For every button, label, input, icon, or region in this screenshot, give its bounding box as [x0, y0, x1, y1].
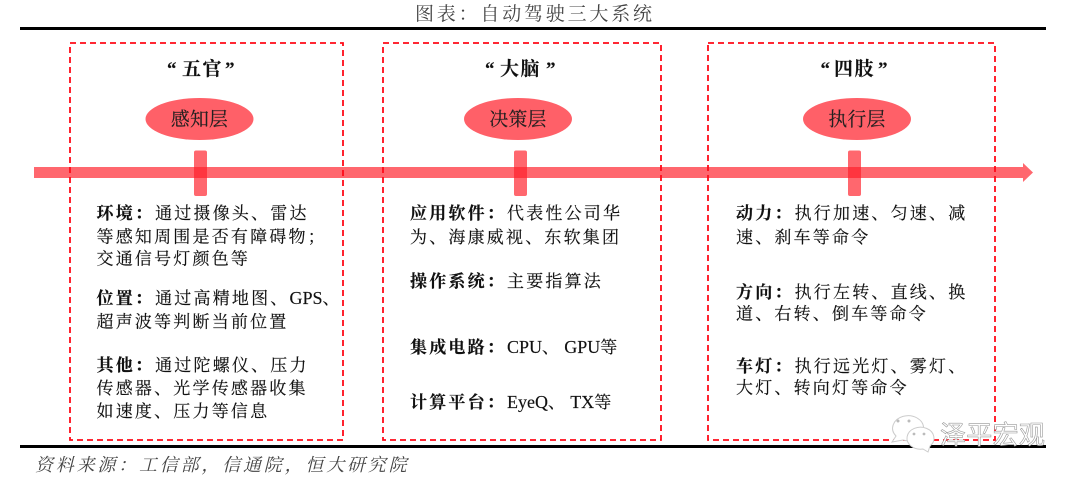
heading: 四肢 [834, 57, 875, 80]
text block: environment [96, 204, 327, 268]
ellipse label [464, 98, 572, 140]
heading: “ [820, 59, 832, 80]
text block: power: 速、刹车等命令 [736, 228, 870, 247]
text block: position: 超声波等判断当前位置 [96, 312, 288, 332]
timeline arrow [34, 163, 1033, 182]
icon: front speech bubble [907, 427, 934, 452]
icon: back speech bubble [892, 416, 924, 442]
ellipse label: 感知层 [171, 108, 228, 130]
text block: integrated circuits: 集成电路：CPU、GPU等 [410, 337, 619, 357]
source note: 资料来源：工信部，信通院，恒大研究院 [35, 455, 410, 475]
text block: environment: 交通信号灯颜色等 [96, 250, 250, 268]
timeline tick [514, 150, 527, 196]
text block: environment: 环境：通过摄像头、雷达 [96, 204, 309, 223]
text block: other: 如速度、压力等信息 [96, 402, 269, 421]
heading: 大脑 [500, 58, 541, 80]
text block: other: 传感器、光学传感器收集 [96, 379, 308, 398]
bottom rule [20, 445, 1046, 448]
text block: application software [410, 204, 622, 247]
text block: direction: 道、右转、倒车等命令 [736, 304, 928, 324]
heading: ” [878, 59, 889, 80]
text block: direction: 方向：执行左转、直线、换 [736, 283, 967, 302]
panel border [708, 43, 995, 440]
text block: power: 动力：执行加速、匀速、减 [736, 203, 967, 223]
panel: perception layer [70, 43, 343, 440]
panel border [383, 43, 661, 440]
text block: other [96, 355, 309, 421]
heading: ” [225, 59, 236, 80]
title: 图表：自动驾驶三大系统 [415, 3, 655, 25]
watermark: WeChat icon and name [892, 416, 1045, 452]
panel: execution layer [708, 43, 995, 440]
text block: operating system: 操作系统：主要指算法 [410, 271, 603, 291]
heading: “ [167, 59, 178, 80]
ellipse label [146, 98, 254, 140]
heading: “ [485, 59, 496, 80]
text block: car lights [736, 356, 967, 398]
timeline tick [848, 150, 861, 196]
watermark name: 泽平宏观 [940, 420, 1045, 450]
heading: 五官 [182, 58, 223, 80]
text block: car lights: 大灯、转向灯等命令 [736, 378, 909, 398]
ellipse label: 决策层 [489, 108, 547, 130]
panel: decision layer [383, 43, 661, 440]
text block: other: 其他：通过陀螺仪、压力 [96, 355, 309, 375]
heading: ” [546, 59, 557, 80]
top rule [20, 27, 1046, 30]
text block: position [96, 288, 342, 332]
timeline tick [194, 150, 207, 196]
panel border [70, 43, 343, 440]
text block: application software: 为、海康威视、东软集团 [410, 228, 621, 247]
text block: position: 位置：通过高精地图、GPS、 [96, 288, 342, 308]
text block: power [736, 203, 967, 247]
text block: application software: 应用软件：代表性公司华 [410, 204, 622, 223]
text block: direction [736, 283, 967, 324]
text block: computing platform: 计算平台：EyeQ、TX等 [410, 392, 613, 412]
text block: car lights: 车灯：执行远光灯、雾灯、 [736, 356, 967, 376]
ellipse label: 执行层 [828, 108, 886, 130]
text block: environment: 等感知周围是否有障碍物； [96, 228, 327, 246]
ellipse label [803, 98, 911, 140]
